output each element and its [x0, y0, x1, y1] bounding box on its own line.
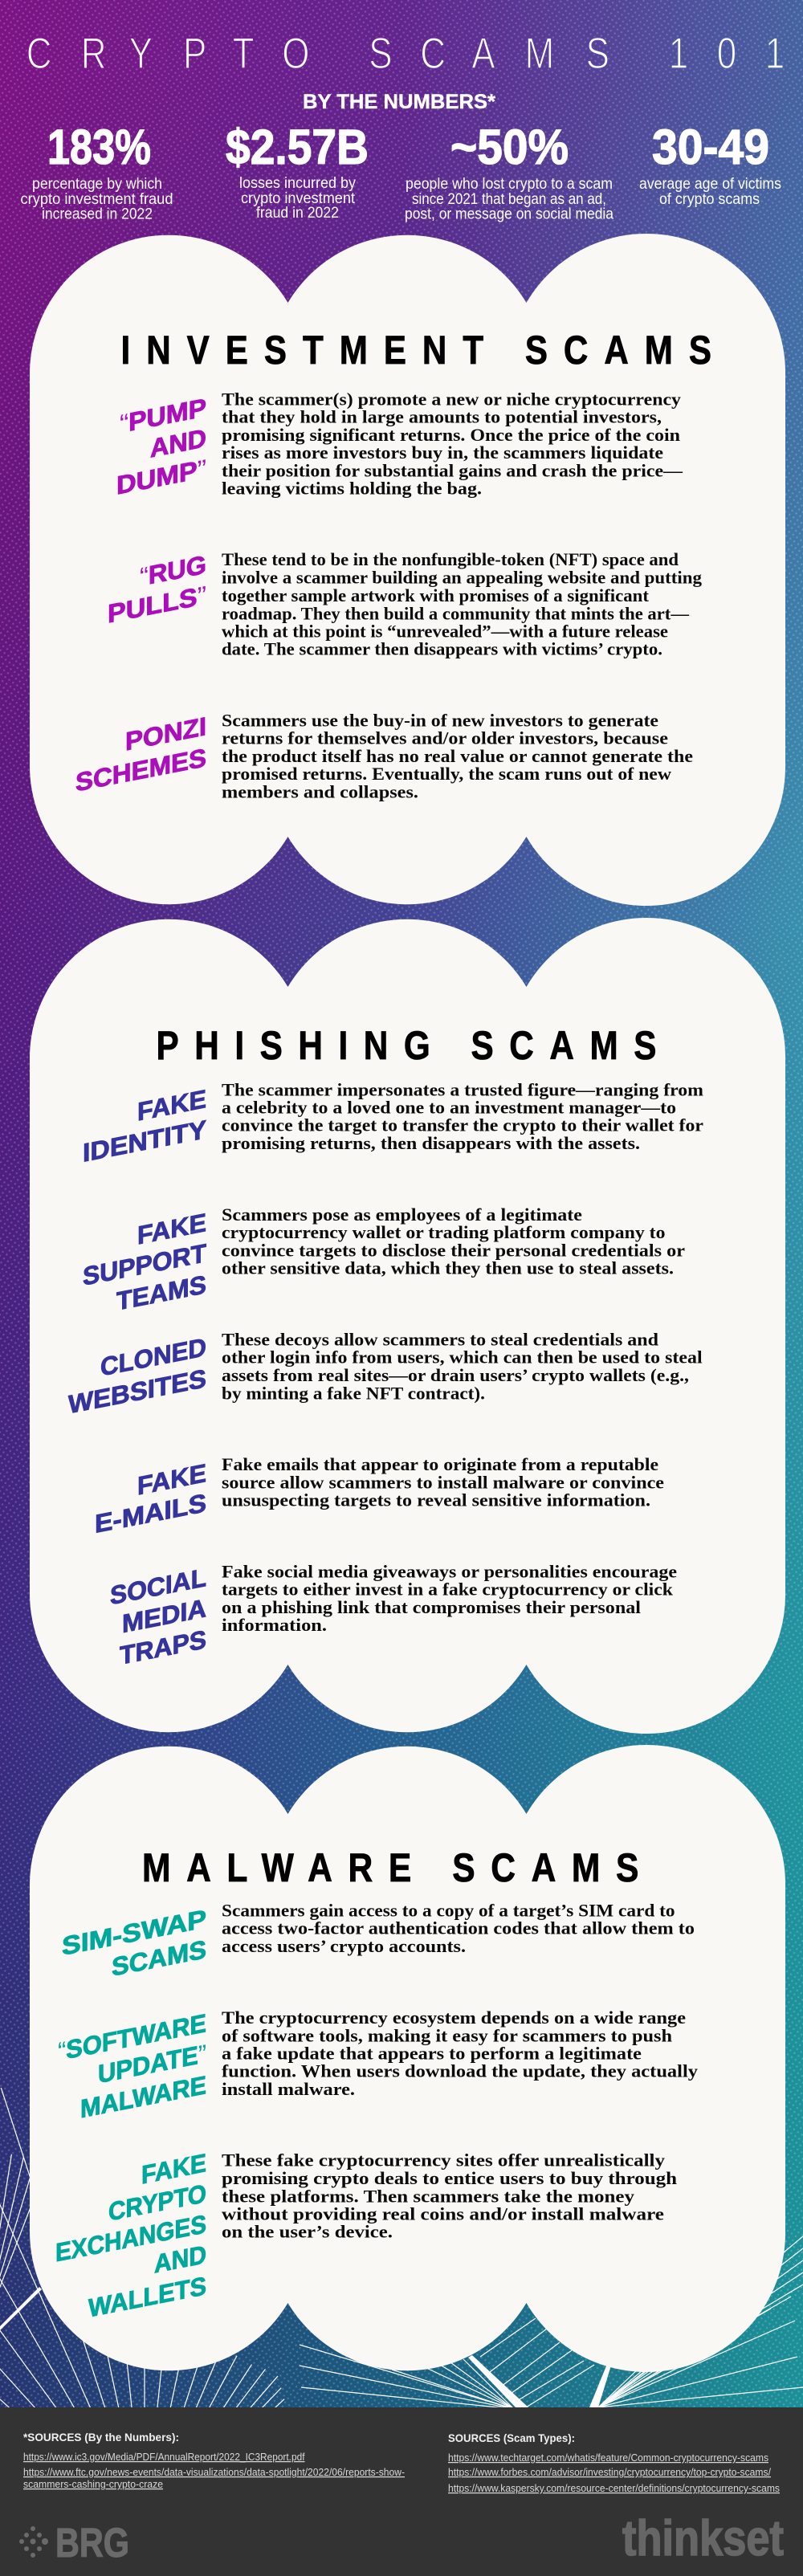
item: fake crypto exchanges and wallets: without providing real coins and/or install malware — [222, 2203, 664, 2223]
item: rug pulls: which at this point is “unrevealed”—with a future release — [222, 621, 668, 641]
stat: ~50%: people who lost crypto to a scam — [406, 175, 613, 193]
item: ponzi schemes: promised returns. Eventually, the scam runs out of new — [222, 764, 672, 784]
item: social media traps: TRAPS — [120, 1624, 206, 1670]
item: fake identity — [83, 1079, 703, 1168]
sources: by the numbers: *SOURCES (By the Numbers): — [23, 2431, 179, 2444]
stat: $2.57B — [226, 120, 369, 222]
item: cloned websites: by minting a fake NFT contract). — [222, 1383, 485, 1403]
sources: by the numbers: https://www.ic3.gov/Media/PDF/AnnualReport/2022_IC3Report.pdf — [23, 2452, 305, 2463]
item: rug pulls: together sample artwork with promises of a significant — [222, 585, 650, 605]
sources: scam types: SOURCES (Scam Types): — [448, 2431, 575, 2444]
item: fake e-mails: E-MAILS — [95, 1488, 206, 1539]
item: social media traps: SOCIAL — [110, 1563, 206, 1610]
item: social media traps: MEDIA — [122, 1593, 206, 1638]
stat: 30-49 — [639, 120, 781, 208]
sources: by the numbers: https://www.ftc.gov/news-events/data-visualizations/data-spotlight/2022/06/reports-show- — [23, 2467, 405, 2478]
item: pump and dump: The scammer(s) promote a new or niche cryptocurrency — [222, 389, 682, 409]
subtitle: by the numbers: BY THE NUMBERS* — [303, 91, 495, 113]
stat: 183%: 183% — [47, 120, 151, 174]
item: fake identity: IDENTITY — [83, 1115, 206, 1168]
item: software update malware: install malware. — [222, 2079, 355, 2099]
logo: BRG — [19, 2520, 129, 2566]
sources: scam types: https://www.kaspersky.com/resource-center/definitions/cryptocurrency-scams — [448, 2483, 780, 2494]
item: fake crypto exchanges and wallets: CRYPTO — [108, 2179, 206, 2227]
stat: $2.57B: losses incurred by — [239, 174, 356, 192]
item: pump and dump: promising significant returns. Once the price of the coin — [222, 425, 681, 445]
item: software update malware — [58, 2007, 699, 2123]
item: rug pulls: PULLS” — [108, 581, 206, 629]
stat: $2.57B: fraud in 2022 — [256, 204, 339, 222]
item: fake crypto exchanges and wallets: promising crypto deals to entice users to buy through — [222, 2168, 678, 2188]
item: sim-swap scams: access users’ crypto accounts. — [222, 1936, 466, 1956]
item: social media traps: information. — [222, 1615, 327, 1635]
item: pump and dump: that they hold in large amounts to potential investors, — [222, 406, 662, 427]
item: sim-swap scams: SIM-SWAP — [62, 1904, 206, 1961]
item: fake e-mails: unsuspecting targets to reveal sensitive information. — [222, 1490, 650, 1510]
item: cloned websites: other login info from users, which can then be used to steal — [222, 1347, 703, 1367]
item: pump and dump: DUMP” — [116, 454, 206, 500]
item: fake identity: The scammer impersonates a trusted figure—ranging from — [222, 1079, 703, 1099]
item: fake e-mails — [95, 1454, 664, 1539]
panel: phishing scams — [30, 918, 785, 1734]
item: fake support teams: other sensitive data, which they then use to steal assets. — [222, 1258, 674, 1278]
item: fake identity: FAKE — [137, 1084, 206, 1127]
item: ponzi schemes: returns for themselves and/or older investors, because — [222, 728, 668, 748]
stat: 30-49: 30-49 — [652, 120, 769, 174]
item: ponzi schemes: PONZI — [125, 711, 206, 756]
item: ponzi schemes: Scammers use the buy-in of new investors to generate — [222, 711, 658, 731]
stat: ~50% — [405, 120, 613, 223]
item: software update malware: MALWARE — [80, 2070, 206, 2123]
item: rug pulls: “RUG — [140, 550, 206, 592]
sources: by the numbers — [23, 2431, 405, 2490]
item: fake e-mails: Fake emails that appear to originate from a reputable — [222, 1454, 658, 1474]
stat: 183%: crypto investment fraud — [21, 190, 173, 208]
item: fake identity: a celebrity to a loved one to an investment manager—to — [222, 1098, 676, 1118]
item: rug pulls: involve a scammer building an appealing website and putting — [222, 567, 703, 588]
item: rug pulls: date. The scammer then disappears with victims’ crypto. — [222, 639, 662, 659]
item: pump and dump: “PUMP — [120, 393, 206, 438]
item: social media traps: Fake social media giveaways or personalities encourage — [222, 1561, 677, 1581]
logo: BRG: BRG — [55, 2520, 129, 2566]
item: cloned websites: These decoys allow scammers to steal credentials and — [222, 1329, 659, 1349]
item: fake identity: convince the target to transfer the crypto to their wallet for — [222, 1115, 703, 1135]
item: pump and dump: leaving victims holding the bag. — [222, 478, 482, 498]
item: software update malware: “SOFTWARE — [58, 2008, 206, 2066]
item: cloned websites: WEBSITES — [68, 1363, 206, 1419]
item: social media traps: targets to either invest in a fake cryptocurrency or click — [222, 1579, 673, 1600]
item: software update malware: The cryptocurrency ecosystem depends on a wide range — [222, 2007, 686, 2028]
item: fake crypto exchanges and wallets — [55, 2148, 678, 2323]
item: cloned websites — [68, 1329, 703, 1419]
item: fake support teams: TEAMS — [116, 1270, 206, 1316]
stat: ~50%: ~50% — [450, 120, 569, 174]
heading: malware scams: MALWARE SCAMS — [142, 1845, 654, 1890]
item: rug pulls — [108, 549, 703, 659]
panel shape: investment — [30, 234, 785, 906]
item: fake crypto exchanges and wallets: FAKE — [141, 2148, 206, 2190]
item: fake support teams: SUPPORT — [83, 1238, 206, 1291]
sources: by the numbers: scammers-cashing-crypto-craze — [23, 2479, 163, 2490]
item: ponzi schemes: members and collapses. — [222, 781, 418, 801]
item: fake e-mails: source allow scammers to install malware or convince — [222, 1472, 664, 1492]
item: fake support teams: FAKE — [137, 1208, 206, 1250]
panel: investment scams — [30, 234, 785, 906]
main title: CRYPTOSCAMS101 — [26, 28, 785, 78]
item: software update malware: of software tools, making it easy for scammers to push — [222, 2025, 673, 2045]
item: sim-swap scams: access two-factor authentication codes that allow them to — [222, 1918, 695, 1938]
stat: 30-49: average age of victims — [639, 175, 781, 193]
item: cloned websites: CLONED — [100, 1332, 206, 1382]
sources: scam types — [448, 2431, 780, 2494]
item: fake support teams — [83, 1204, 685, 1316]
heading: phishing scams: PHISHING SCAMS — [156, 1023, 672, 1068]
item: rug pulls: roadmap. They then build a community that mints the art— — [222, 603, 690, 623]
item: sim-swap scams — [62, 1901, 695, 1982]
item: pump and dump: rises as more investors buy in, the scammers liquidate — [222, 442, 663, 463]
item: sim-swap scams: SCAMS — [112, 1934, 206, 1982]
item: fake support teams: cryptocurrency wallet or trading platform company to — [222, 1222, 665, 1242]
stat: 30-49: of crypto scams — [659, 190, 760, 208]
footer background — [0, 2407, 803, 2576]
item: fake identity: promising returns, then disappears with the assets. — [222, 1133, 640, 1153]
item: fake e-mails: FAKE — [137, 1458, 206, 1501]
item: software update malware: UPDATE” — [98, 2039, 206, 2089]
item: ponzi schemes — [75, 711, 693, 801]
item: fake crypto exchanges and wallets: EXCHANGES — [55, 2209, 206, 2267]
panel shape: phishing — [30, 918, 785, 1734]
sources: scam types: https://www.forbes.com/advisor/investing/cryptocurrency/top-crypto-scams/ — [448, 2467, 771, 2478]
stat: ~50%: post, or message on social media — [405, 206, 613, 223]
stat: $2.57B: crypto investment — [241, 190, 356, 207]
item: fake crypto exchanges and wallets: These fake cryptocurrency sites offer unrealistically — [222, 2150, 666, 2170]
stat: $2.57B: $2.57B — [226, 120, 369, 174]
item: pump and dump — [116, 389, 683, 500]
item: software update malware: a fake update that appears to perform a legitimate — [222, 2043, 642, 2063]
item: ponzi schemes: SCHEMES — [75, 743, 206, 797]
stat: 183% — [21, 120, 173, 223]
item: sim-swap scams: Scammers gain access to a copy of a target’s SIM card to — [222, 1901, 675, 1921]
item: ponzi schemes: the product itself has no real value or cannot generate the — [222, 746, 693, 766]
item: fake crypto exchanges and wallets: on the user’s device. — [222, 2222, 393, 2242]
panel: malware scams — [30, 1745, 785, 2372]
item: software update malware: function. When users download the update, they actually — [222, 2061, 699, 2081]
sources: scam types: https://www.techtarget.com/whatis/feature/Common-cryptocurrency-scams — [448, 2452, 768, 2464]
item: pump and dump: their position for substantial gains and crash the price— — [222, 460, 683, 480]
item: fake crypto exchanges and wallets: AND — [154, 2240, 206, 2279]
item: social media traps: on a phishing link that compromises their personal — [222, 1597, 641, 1617]
item: fake crypto exchanges and wallets: these platforms. Then scammers take the money — [222, 2186, 635, 2206]
footer — [0, 2407, 803, 2576]
item: pump and dump: AND — [150, 423, 206, 463]
item: fake support teams: convince targets to disclose their personal credentials or — [222, 1240, 685, 1260]
item: social media traps — [110, 1561, 677, 1670]
stat: 183%: increased in 2022 — [42, 206, 153, 223]
stat: 183%: percentage by which — [32, 175, 162, 193]
item: fake support teams: Scammers pose as employees of a legitimate — [222, 1204, 582, 1225]
item: cloned websites: assets from real sites—or drain users’ crypto wallets (e.g., — [222, 1365, 689, 1385]
panel shape: malware — [30, 1745, 785, 2372]
decorative ray fans at bottom — [0, 2050, 803, 2529]
item: fake crypto exchanges and wallets: WALLETS — [88, 2271, 206, 2323]
stat: ~50%: since 2021 that began as an ad, — [412, 190, 606, 208]
item: rug pulls: These tend to be in the nonfungible-token (NFT) space and — [222, 549, 679, 569]
